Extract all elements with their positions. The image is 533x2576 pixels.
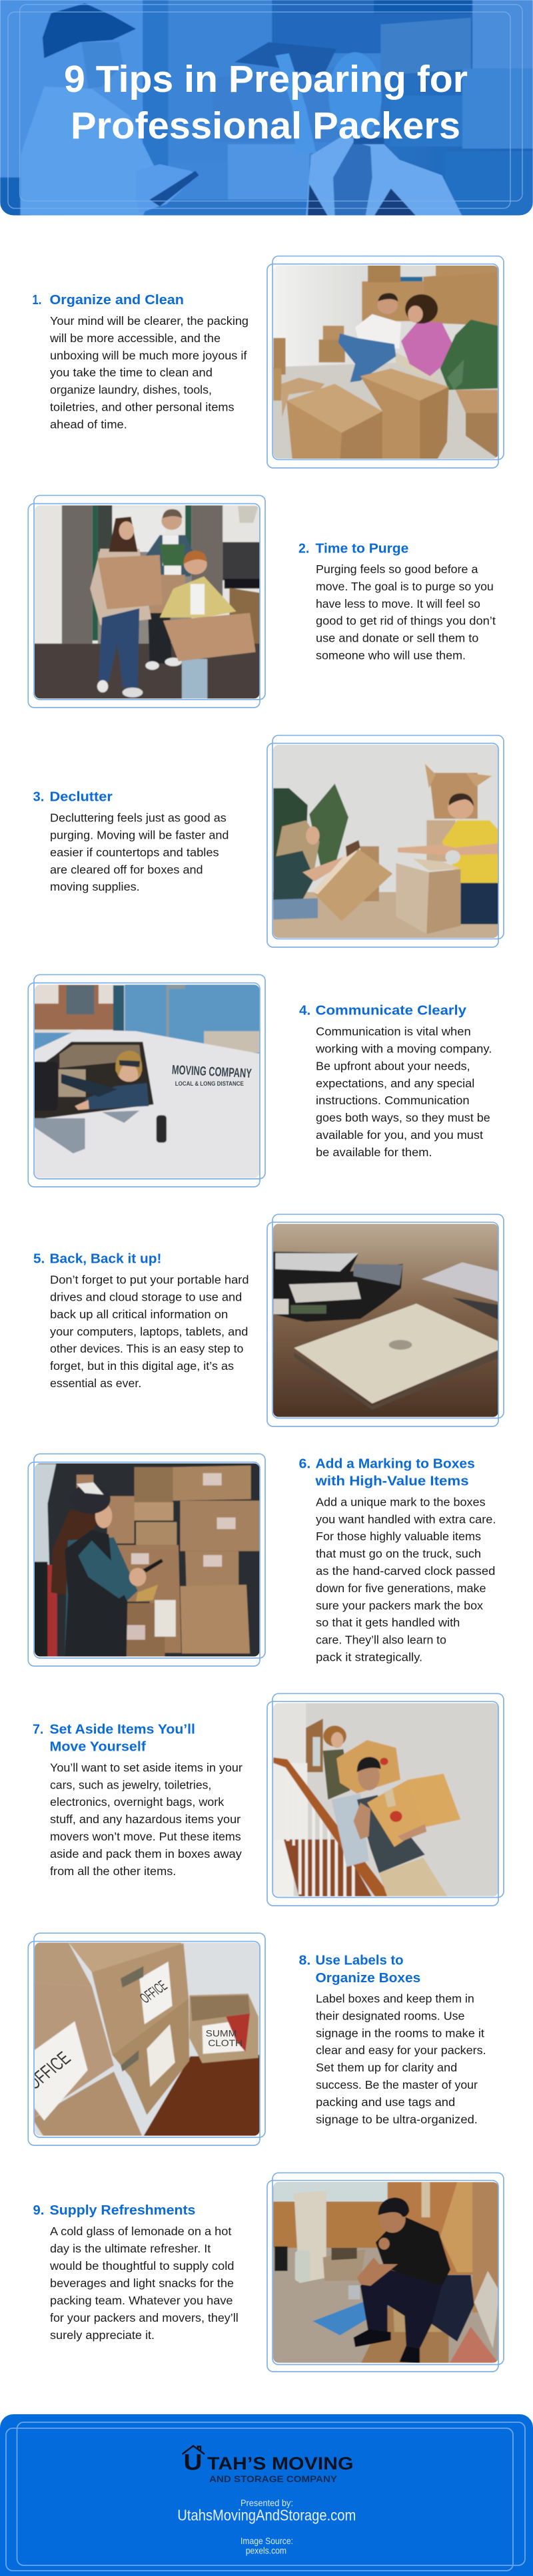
photo: moving van driver: LOCAL & LONG DISTANCE [175,1080,244,1088]
heading: 6. [298,1456,310,1471]
title [64,58,468,147]
panel: tip 6 [28,1454,496,1666]
photo: moving van driver: MOVING COMPANY [171,1063,253,1081]
body text: Communication is vital when [316,1025,471,1038]
body text: toiletries, and other personal items [50,401,235,414]
heading: 2. [298,542,309,556]
heading: Communicate Clearly [316,1003,467,1018]
photo frames [267,1693,504,1906]
body text: Your mind will be clearer, the packing [50,314,249,327]
body text: other devices. This is an easy step to [50,1342,243,1355]
body text: movers won’t move. Put these items [50,1830,241,1843]
image source url: pexels.com [246,2545,286,2556]
body text: Purging feels so good before a [316,562,478,576]
photo frames [28,974,265,1187]
photo: couple packing boxes [272,744,500,939]
hero header [0,0,533,216]
photo frames [267,2173,504,2372]
heading: Use Labels to [316,1954,404,1968]
photo: couple carrying boxes downstairs [272,1702,500,1898]
body text [316,1495,496,1664]
photo: labeled boxes: OFFICE [137,1978,171,2006]
photo frames [267,1214,504,1426]
body text: back up all critical information on [50,1307,228,1321]
body text: unboxing will be much more joyous if [50,349,247,362]
heading: Set Aside Items You’ll [49,1723,195,1737]
panel: tip 2 [28,495,496,708]
heading: Organize Boxes [316,1971,420,1986]
body text: aside and pack them in boxes away [50,1847,242,1860]
heading: 8. [298,1954,310,1968]
body text: for your packers and movers, they’ll [50,2311,239,2324]
heading: 9. [33,2203,44,2218]
body text: easier if countertops and tables [50,845,219,859]
heading: Supply Refreshments [49,2203,195,2218]
heading: Declutter [49,789,113,804]
photo: couple sitting among boxes [272,265,500,460]
body text: signage in the rooms to make it [316,2026,484,2039]
website: UtahsMovingAndStorage.com [177,2507,356,2524]
heading [298,1456,475,1489]
body text: as the hand-carved clock passed [316,1564,495,1578]
heading: 1. [32,293,41,308]
hero decorative frames [8,5,522,208]
photo: family carrying boxes [32,505,262,700]
body text: working with a moving company. [315,1042,492,1056]
body text [315,1025,492,1159]
photo: labeled boxes [22,1942,262,2137]
photo: laptop and devices on table [272,1223,500,1418]
body text: packing team. Whatever you have [50,2294,233,2307]
body text: Don’t forget to put your portable hard [50,1273,249,1287]
heading: Organize and Clean [49,293,184,308]
photo: mover taking a snack break [272,2181,500,2364]
footer background [0,2414,533,2576]
body text: you take the time to clean and [50,366,213,379]
body text: You’ll want to set aside items in your [50,1761,243,1774]
photo: labeled boxes: SUMM [206,2029,237,2039]
body text: Label boxes and keep them in [316,1992,474,2005]
photo: moving van driver [32,984,262,1180]
body text: signage to be ultra-organized. [316,2113,478,2126]
body text: Add a unique mark to the boxes [316,1495,486,1508]
body text: forget, but in this digital age, it’s as [50,1359,234,1373]
panel: tip 3 [33,736,504,947]
company logo: U [184,2450,203,2475]
body text: goes both ways, so they must be [316,1111,490,1124]
body text: A cold glass of lemonade on a hot [50,2225,232,2238]
body text: essential as ever. [50,1377,141,1390]
body text: Set them up for clarity and [316,2061,457,2074]
body text [49,2225,239,2342]
body text: be available for them. [316,1146,432,1159]
heading: Back, Back it up! [49,1251,161,1266]
panel: tip 9 [33,2173,504,2372]
body text: would be thoughtful to supply cold [49,2259,235,2272]
title: 9 Tips in Preparing for [64,58,468,101]
panel: tip 8 [22,1933,486,2145]
photo frames [267,736,504,947]
body text: moving supplies. [50,880,140,893]
footer [0,2414,533,2576]
body text [50,1761,243,1878]
heading: Add a Marking to Boxes [316,1456,475,1471]
image source: Image Source: [241,2535,293,2546]
body text: down for five generations, make [316,1582,486,1595]
presented by: Presented by: [241,2497,293,2508]
body text: success. Be the master of your [316,2078,478,2091]
body text: Decluttering feels just as good as [50,811,227,825]
hero photo with blue tint [0,0,533,216]
body text: day is the ultimate refresher. It [50,2242,211,2255]
body text: care. They’ll also learn to [316,1633,446,1647]
body text: have less to move. It will feel so [316,597,480,610]
body text: sure your packers mark the box [316,1599,483,1612]
body text: so that it gets handled with [316,1616,460,1629]
heading [298,1954,420,1986]
icon: house roof [183,2446,205,2454]
body text: surely appreciate it. [50,2328,155,2342]
body text: expectations, and any special [316,1076,474,1090]
photo frames [28,495,265,708]
body text [49,314,249,431]
heading: 5. [33,1251,45,1266]
body text [316,562,496,662]
body text: use and donate or sell them to [316,632,478,645]
heading: 4. [299,1003,310,1018]
photo frames [28,1454,265,1666]
body text: available for you, and you must [316,1128,483,1142]
body text: For those highly valuable items [316,1530,481,1543]
photo: labeled boxes: CLOTH [208,2039,243,2049]
photo: woman checking fragile boxes [32,1462,262,1658]
body text: will be more accessible, and the [49,331,221,345]
panel: tip 4 [28,974,492,1187]
body text: from all the other items. [50,1864,176,1878]
body text: ahead of time. [50,417,127,431]
body text [50,1273,249,1390]
body text: good to get rid of things you don’t [316,614,496,628]
body text: beverages and light snacks for the [50,2276,234,2290]
body text: that must go on the truck, such [316,1547,481,1560]
body text: clear and easy for your packers. [316,2043,486,2057]
body text: instructions. Communication [316,1094,470,1107]
heading: 3. [33,789,44,804]
body text [50,811,229,893]
heading: with High-Value Items [314,1474,469,1489]
body text: their designated rooms. Use [316,2009,465,2022]
body text: organize laundry, dishes, tools, [50,383,212,397]
footer frames [6,2422,525,2571]
heading: Move Yourself [49,1740,146,1755]
body text: stuff, and any hazardous items your [50,1813,241,1826]
heading [33,1723,195,1755]
panel: tip 7 [33,1693,504,1906]
heading: Time to Purge [316,542,408,556]
body text: your computers, laptops, tablets, and [50,1325,248,1338]
body text: someone who will use them. [316,648,466,662]
company logo: TAH’S MOVING [207,2454,353,2473]
body text: packing and use tags and [316,2095,455,2109]
heading: 7. [33,1723,43,1737]
title: Professional Packers [71,105,460,147]
body text: drives and cloud storage to use and [50,1290,242,1303]
body text: you want handled with extra care. [316,1512,496,1526]
panel: tip 1 [32,256,504,468]
body text: purging. Moving will be faster and [50,828,229,841]
body text: electronics, overnight bags, work [50,1795,224,1809]
body text: cars, such as jewelry, toiletries, [50,1778,211,1791]
body text: move. The goal is to purge so you [316,580,494,593]
photo: labeled boxes: OFFICE [22,2048,75,2094]
body text: pack it strategically. [316,1651,422,1664]
body text: are cleared off for boxes and [50,863,203,876]
company logo: AND STORAGE COMPANY [209,2474,337,2484]
body text [316,1992,486,2126]
photo frames [267,256,504,468]
panel: tip 5 [33,1214,504,1426]
company logo [183,2446,353,2484]
photo frames [28,1933,265,2145]
body text: Be upfront about your needs, [316,1059,470,1072]
